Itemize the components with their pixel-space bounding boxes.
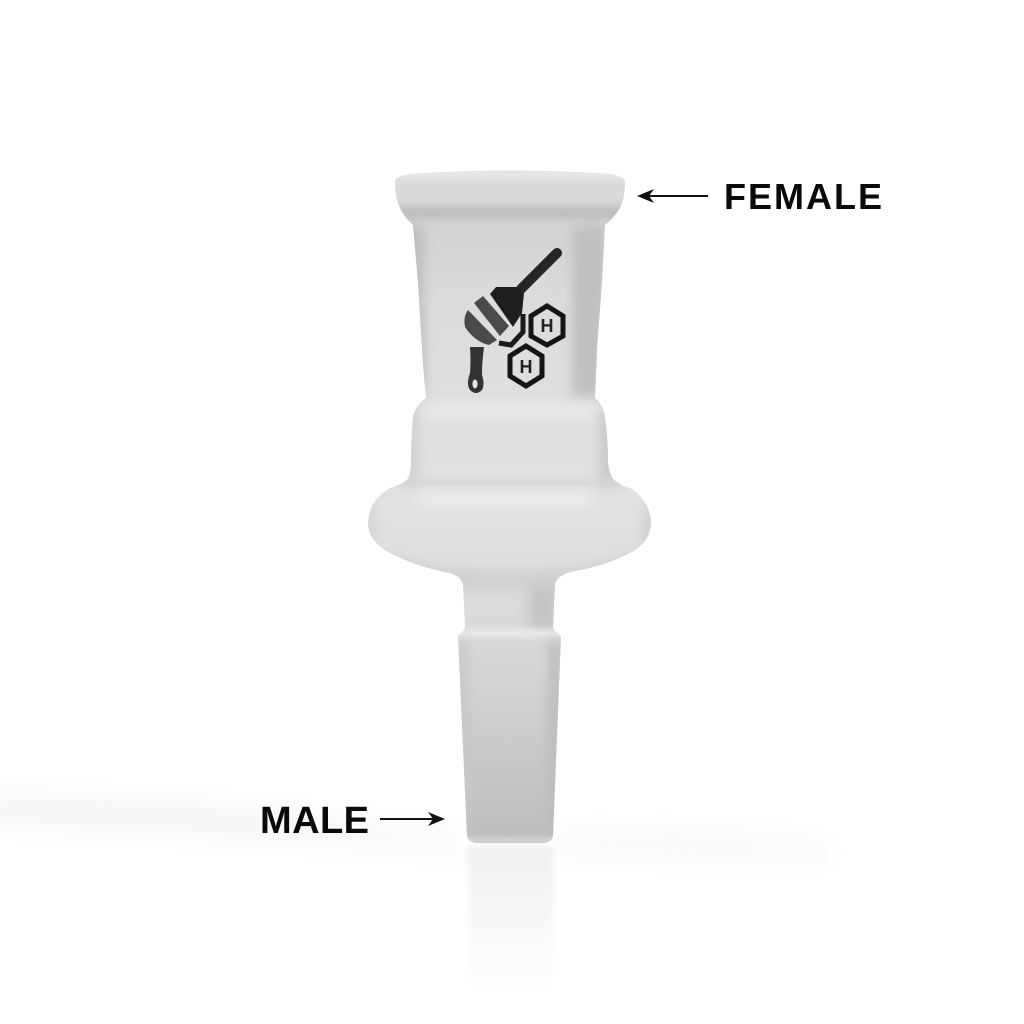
icon: honey drip [468, 347, 484, 393]
lip highlight [401, 173, 618, 176]
icon: dipper head [490, 287, 524, 327]
icon: dipper handle [521, 253, 557, 289]
label: female: FEMALE [724, 176, 882, 217]
neck side shading [412, 224, 428, 394]
ring highlight and shadow [431, 405, 590, 415]
arrow: male [380, 812, 445, 826]
icon: lower hexagon H: H [520, 357, 532, 377]
icon: dipper stripe upper [474, 296, 509, 336]
glass adapter body [360, 170, 658, 845]
disc underside shadow [408, 561, 610, 589]
icon: upper hexagon H: H [540, 316, 554, 336]
logo: honey dipper and hexagons [464, 253, 563, 393]
lip shadow band [395, 206, 625, 220]
icon: drip highlight [472, 380, 478, 388]
icon: partial hexagon [499, 314, 523, 345]
stem shading [526, 586, 555, 628]
icon: dipper stripe lower [464, 310, 497, 345]
arrow: female [637, 189, 708, 203]
reflection under the adapter [468, 846, 554, 996]
label: male: MALE [260, 800, 369, 842]
